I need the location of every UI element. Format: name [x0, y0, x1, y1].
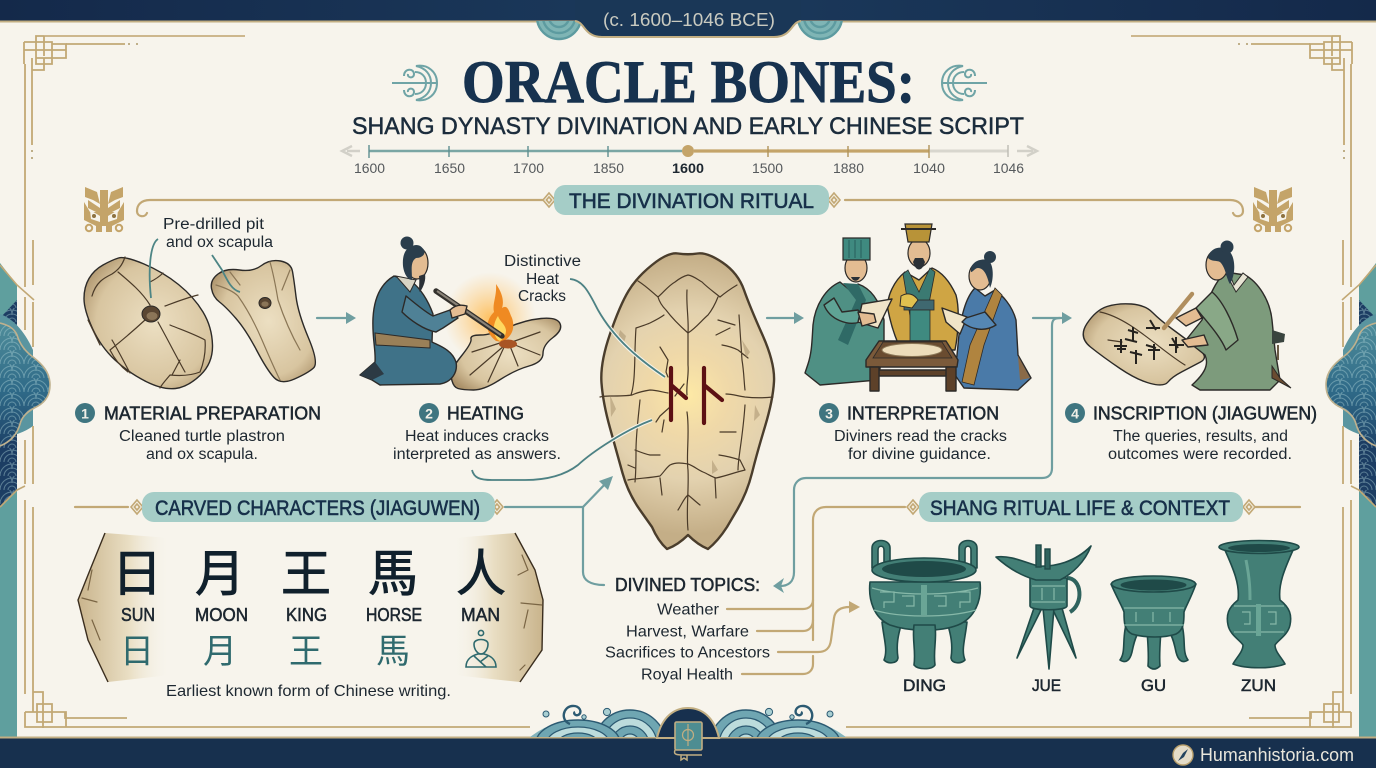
heading: the divination ritual [137, 185, 1243, 216]
carved characters [112, 546, 506, 602]
icon: book [675, 722, 702, 760]
vessel: jue [996, 545, 1091, 669]
step 1 label: MATERIAL PREPARATION [104, 404, 321, 424]
carved characters: 王 [281, 546, 331, 602]
timeline: 1040 [913, 161, 945, 176]
heading: shang ritual life [813, 492, 1300, 640]
callout: distinctive heat cracks [504, 253, 581, 305]
website credit: Humanhistoria.com [1200, 745, 1354, 765]
callout: pre-drilled pit: Pre-drilled pit [163, 216, 265, 233]
date label: (c. 1600–1046 BCE) [603, 9, 775, 30]
step 1 label [75, 403, 321, 463]
step 1 label: 1 [81, 406, 89, 422]
bottom navy banner [0, 736, 1376, 768]
divined topics: Harvest, Warfare [626, 624, 749, 640]
timeline: 1600 [672, 161, 704, 176]
vessel label: gu: GU [1141, 676, 1166, 695]
timeline: 1500 [752, 161, 783, 176]
step 2 label: 2 [425, 406, 433, 422]
arrow 1 to 2 [317, 312, 356, 324]
step 4 label: The queries, results, and [1113, 428, 1288, 445]
step 4 label: 4 [1071, 406, 1079, 422]
divined topics [605, 575, 770, 684]
top navy banner [0, 0, 1376, 39]
step 3 illustration: interpretation [805, 224, 1031, 391]
callout: distinctive heat cracks: Heat [526, 271, 560, 288]
leader: distinctive heat cracks to shell [472, 279, 665, 480]
step 3 label: 3 [825, 406, 833, 422]
vessel: ding [870, 540, 980, 669]
subtitle: SHANG DYNASTY DIVINATION AND EARLY CHINESE SCRIPT [352, 113, 1024, 140]
teal modern characters: 日 [120, 633, 154, 671]
carved characters: 人 [456, 546, 506, 602]
title: ORACLE BONES: [462, 49, 915, 115]
connector: interpretation to inscription and divined topics [773, 312, 1072, 593]
character meanings: SUN [121, 605, 155, 625]
step 1 illustration: plastron and scapula [84, 257, 315, 389]
step 2 label: HEATING [447, 404, 524, 424]
step 4 label [1065, 403, 1317, 463]
teal modern characters [120, 633, 410, 671]
callout leader lines [150, 239, 240, 298]
carved characters: 日 [112, 546, 162, 602]
center oracle shell [600, 253, 774, 549]
character meanings [121, 605, 500, 625]
step 2 label: Heat induces cracks [405, 428, 549, 445]
step 1 label: Cleaned turtle plastron [119, 428, 285, 445]
step 2 label: interpreted as answers. [393, 446, 561, 463]
character meanings: MAN [461, 605, 500, 625]
vessel label: jue: JUE [1032, 676, 1061, 695]
timeline: 1850 [593, 161, 624, 176]
teal modern characters: 月 [203, 633, 237, 671]
arrow 2 to 3 [767, 312, 804, 324]
teal modern characters: 馬 [376, 633, 410, 671]
divined topics: Weather [657, 602, 720, 618]
timeline: 1880 [833, 161, 864, 176]
callout: distinctive heat cracks: Distinctive [504, 253, 581, 270]
heading: carved characters [75, 492, 503, 522]
step 4 label: outcomes were recorded. [1108, 446, 1292, 463]
divined topics: Royal Health [641, 666, 733, 684]
teal modern characters: 王 [289, 633, 323, 671]
bone scroll fragments [78, 533, 543, 682]
divined topics: Sacrifices to Ancestors [605, 644, 770, 662]
connectors: topics to vessels [727, 600, 860, 674]
character meanings: KING [286, 605, 327, 625]
heading: the divination ritual: THE DIVINATION RITUAL [569, 189, 814, 213]
icon: man [466, 630, 496, 667]
heading: shang ritual life: SHANG RITUAL LIFE & CONTEXT [930, 497, 1230, 520]
carved characters: 馬 [368, 546, 418, 602]
vessel label: zun: ZUN [1241, 676, 1276, 695]
left side ornamental band [0, 240, 50, 738]
step 3 label: for divine guidance. [848, 446, 991, 463]
vessel: gu [1111, 576, 1196, 669]
title swirl right [942, 66, 987, 100]
step 3 label [819, 403, 1007, 463]
character meanings: HORSE [366, 605, 422, 625]
timeline: 1650 [434, 161, 465, 176]
heading: carved characters: CARVED CHARACTERS (JIAGUWEN) [155, 497, 480, 520]
step 3 label: INTERPRETATION [847, 404, 999, 424]
timeline: 1700 [513, 161, 544, 176]
timeline: 1046 [993, 161, 1024, 176]
timeline [342, 145, 1037, 176]
callout: ox scapula: and ox scapula [166, 234, 273, 251]
right side ornamental band [1326, 240, 1376, 738]
vessel: zun [1219, 540, 1299, 668]
wave decoration [530, 706, 846, 768]
step 2 label [393, 403, 561, 463]
connector: carved characters to shell and topics [505, 476, 613, 585]
step 3 label: Diviners read the cracks [834, 428, 1007, 445]
caption: Earliest known form of Chinese writing. [166, 683, 451, 700]
divined topics: DIVINED TOPICS: [615, 575, 760, 595]
step 4 label: INSCRIPTION (JIAGUWEN) [1093, 404, 1317, 424]
step 4 illustration: inscription [1083, 240, 1291, 390]
step 2 illustration: heating [360, 236, 561, 390]
title swirl left [392, 66, 437, 100]
icon: compass [1173, 745, 1193, 765]
callout: distinctive heat cracks: Cracks [518, 288, 566, 305]
icon: right taotie mask [1253, 187, 1293, 232]
character meanings: MOON [195, 605, 248, 625]
icon: left taotie mask [84, 187, 124, 232]
vessel label: ding: DING [903, 676, 946, 695]
step 1 label: and ox scapula. [146, 446, 258, 463]
carved characters: 月 [195, 546, 245, 602]
timeline: 1600 [354, 161, 385, 176]
